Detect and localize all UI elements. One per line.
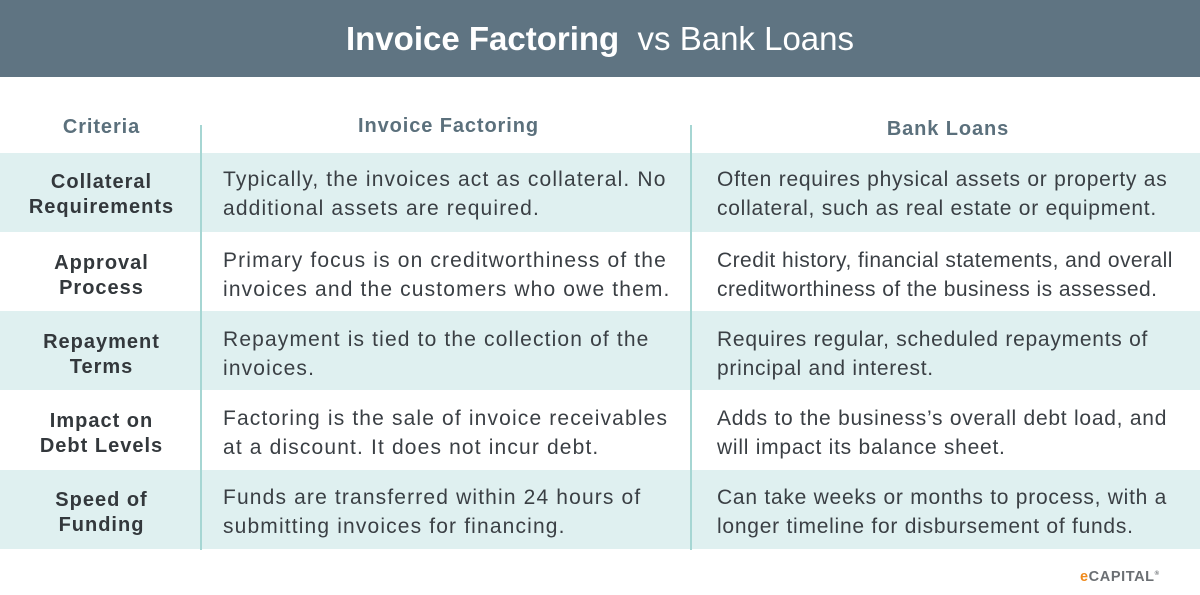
row 5 bank	[717, 486, 1167, 538]
row 1 bank: Often requires physical assets or property as	[717, 168, 1167, 191]
row 3 criteria: Repayment	[43, 331, 160, 353]
row 2 bank	[717, 249, 1173, 301]
row 4 bank	[717, 407, 1167, 459]
row 2 factoring: invoices and the customers who owe them.	[223, 278, 671, 301]
row 3 factoring	[223, 328, 650, 380]
row 4 criteria	[40, 410, 163, 457]
row 4 criteria: Debt Levels	[40, 435, 163, 457]
row 5 criteria	[55, 489, 148, 536]
row 1 criteria: Requirements	[29, 196, 174, 218]
row 3 factoring: invoices.	[223, 357, 315, 380]
column header: invoice factoring: Invoice Factoring	[358, 115, 539, 137]
row 3 bank	[717, 328, 1148, 380]
row 5 bank: longer timeline for disbursement of funds.	[717, 515, 1134, 538]
row 5 factoring: Funds are transferred within 24 hours of	[223, 486, 641, 509]
row 2 factoring: Primary focus is on creditworthiness of the	[223, 249, 667, 272]
row 1 bank	[717, 168, 1167, 220]
row 5 criteria: Funding	[59, 514, 144, 536]
row 4 factoring: Factoring is the sale of invoice receivables	[223, 407, 668, 430]
row 5 factoring	[223, 486, 641, 538]
row band 1	[0, 153, 1200, 232]
row 3 bank: principal and interest.	[717, 357, 934, 380]
row 2 criteria	[54, 252, 149, 299]
row 3 criteria: Terms	[70, 356, 133, 378]
row 5 factoring: submitting invoices for financing.	[223, 515, 566, 538]
row 3 criteria	[43, 331, 160, 378]
row 1 criteria	[29, 171, 174, 218]
column header: bank loans: Bank Loans	[887, 118, 1009, 140]
row 4 bank: will impact its balance sheet.	[717, 436, 1006, 459]
row 1 criteria: Collateral	[51, 171, 152, 193]
row 4 factoring: at a discount. It does not incur debt.	[223, 436, 599, 459]
row 4 bank: Adds to the business’s overall debt load, and	[717, 407, 1167, 430]
row 1 factoring: Typically, the invoices act as collateral. No	[223, 168, 667, 191]
row 2 criteria: Approval	[54, 252, 149, 274]
column header: criteria: Criteria	[63, 116, 140, 138]
title	[0, 0, 1200, 77]
row band 5	[0, 470, 1200, 549]
row 5 criteria: Speed of	[55, 489, 148, 511]
title: Invoice Factoring vs Bank Loans	[346, 20, 854, 57]
row 1 bank: collateral, such as real estate or equipment.	[717, 197, 1157, 220]
row 3 bank: Requires regular, scheduled repayments of	[717, 328, 1148, 351]
logo: eCAPITAL®	[1080, 569, 1160, 585]
row 1 factoring: additional assets are required.	[223, 197, 540, 220]
row 2 bank: Credit history, financial statements, and overall	[717, 249, 1173, 272]
row band 3	[0, 311, 1200, 390]
row 4 factoring	[223, 407, 668, 459]
row 3 factoring: Repayment is tied to the collection of the	[223, 328, 650, 351]
row 2 criteria: Process	[59, 277, 144, 299]
row 2 factoring	[223, 249, 671, 301]
row 5 bank: Can take weeks or months to process, with a	[717, 486, 1167, 509]
row 4 criteria: Impact on	[50, 410, 153, 432]
row 2 bank: creditworthiness of the business is assessed.	[717, 278, 1157, 301]
row 1 factoring	[223, 168, 667, 220]
